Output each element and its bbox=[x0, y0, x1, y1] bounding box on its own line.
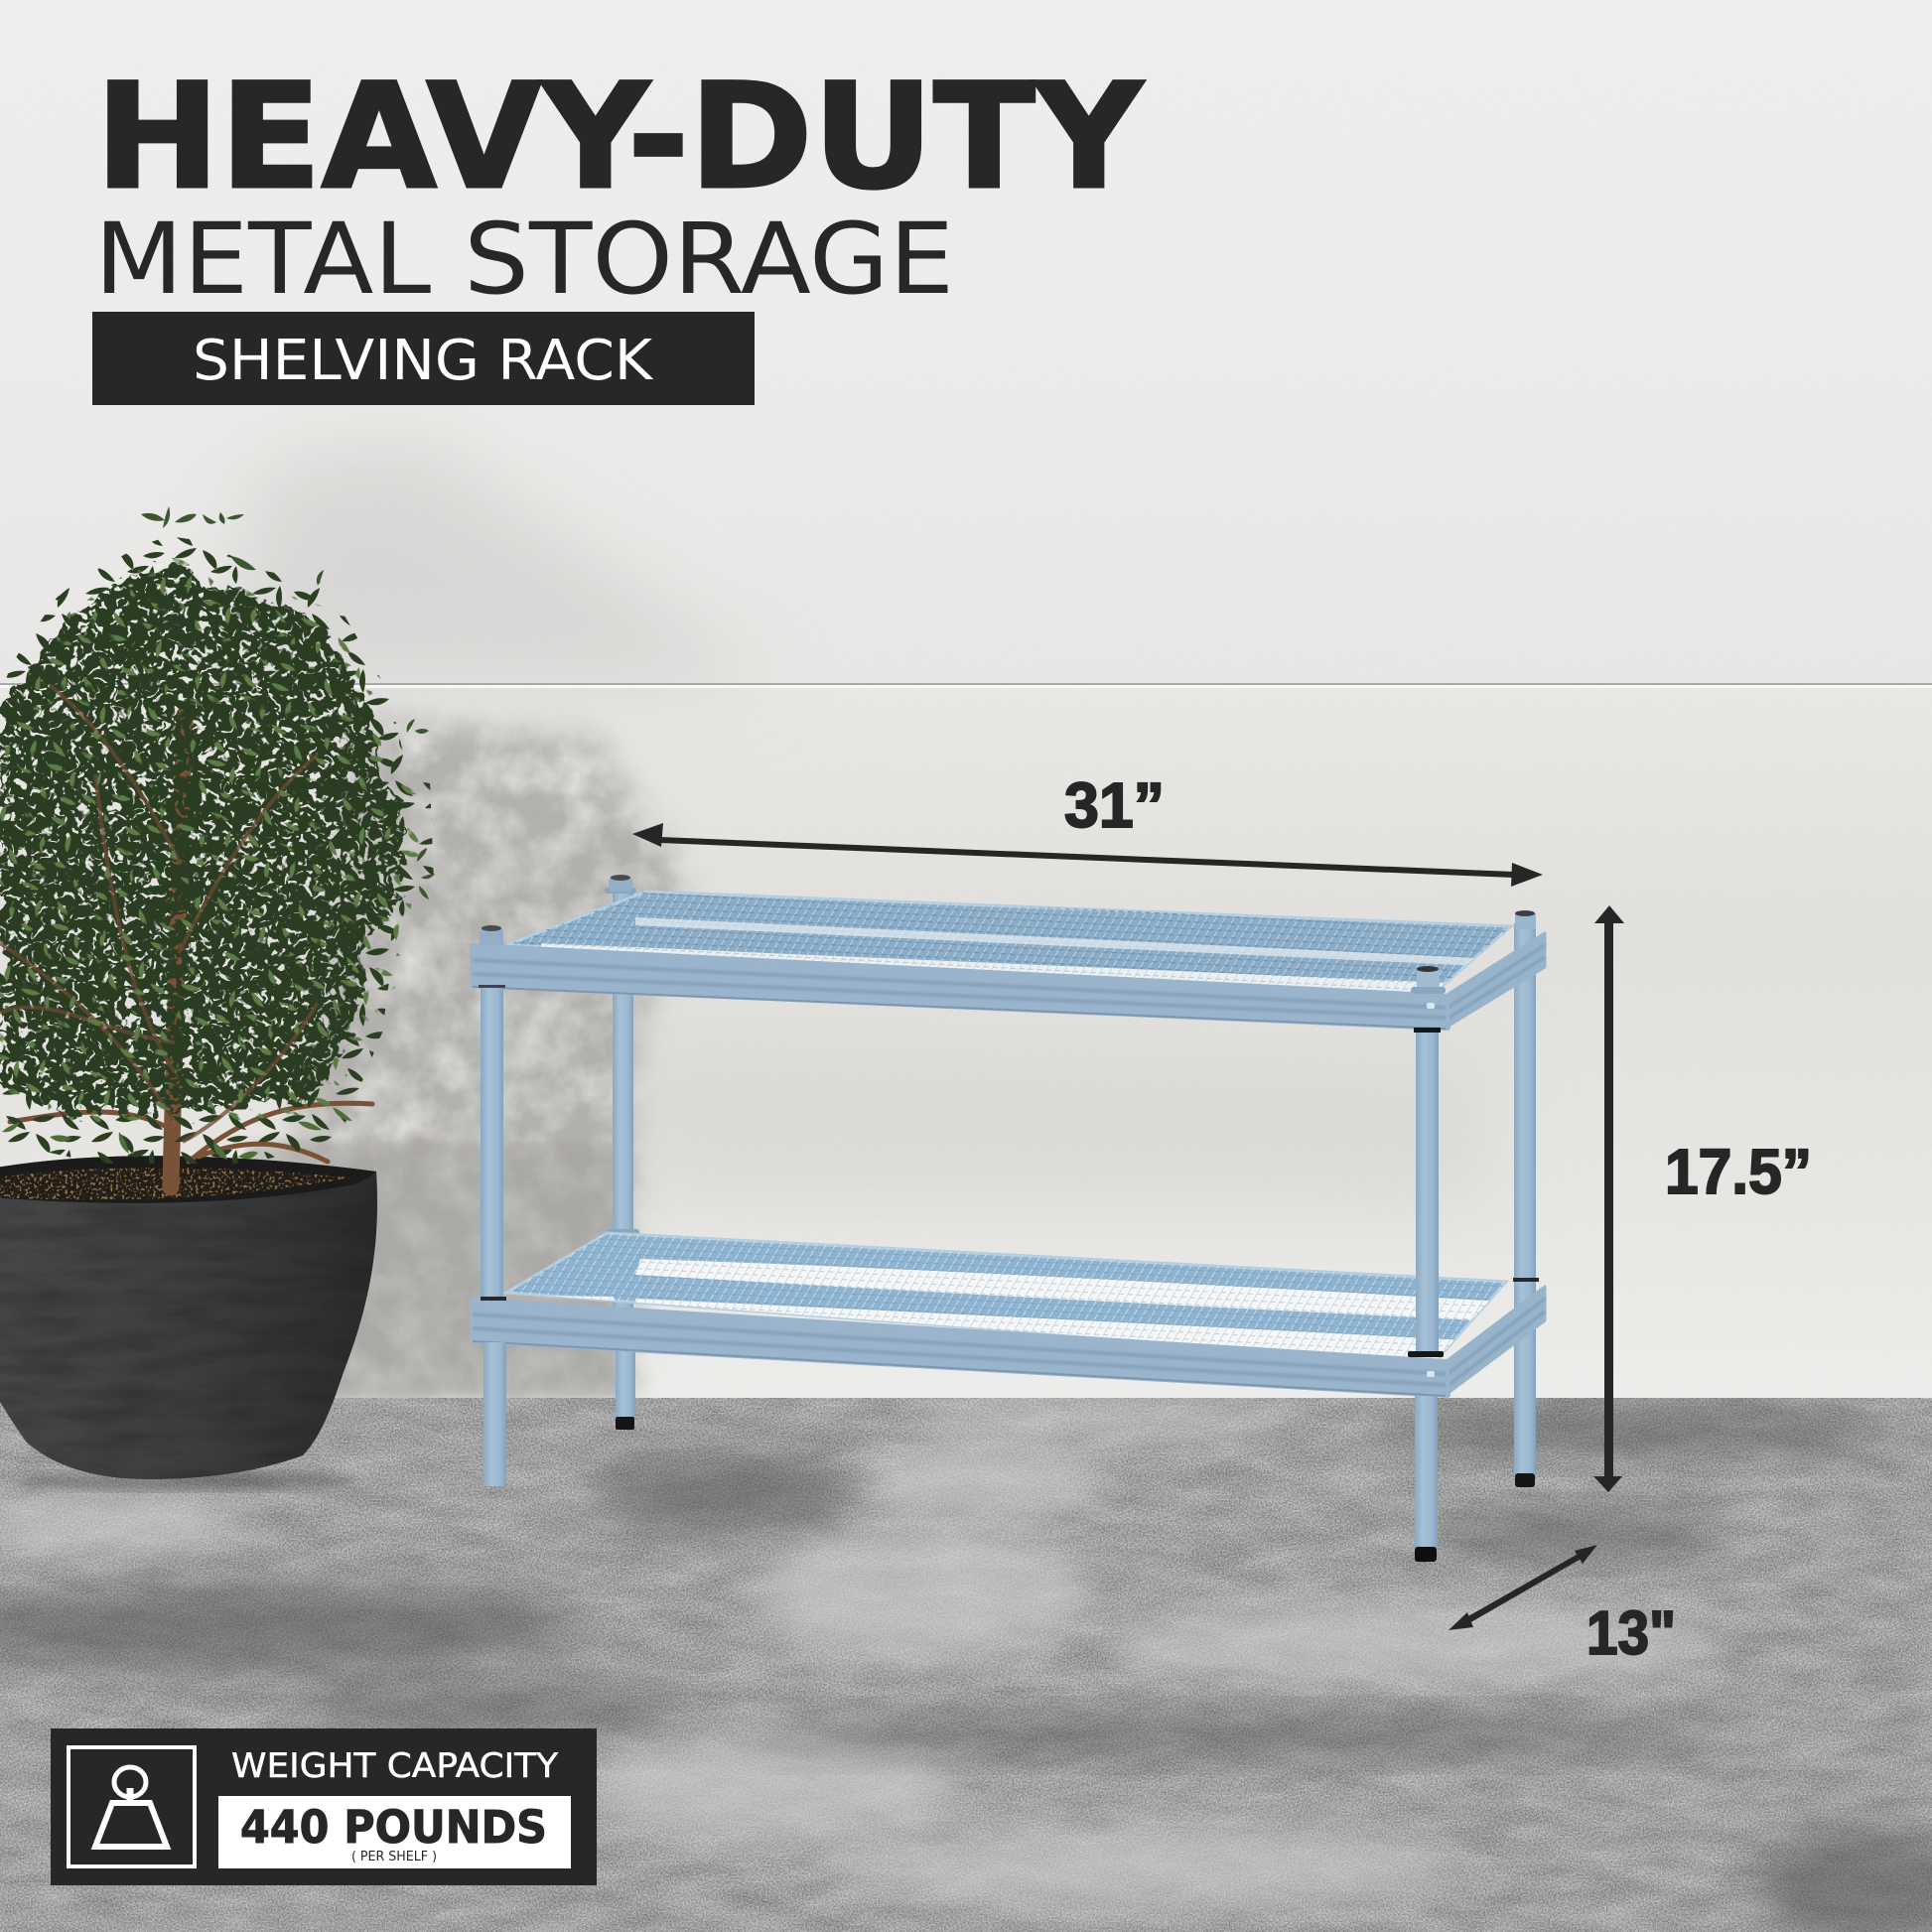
top shelf front rail bbox=[473, 946, 1448, 1029]
back right post bbox=[1513, 910, 1539, 1487]
bottom shelf mesh bbox=[503, 1231, 1509, 1358]
icon: weight bbox=[69, 1747, 195, 1866]
label: height 17.5: 17.5” bbox=[1665, 1136, 1812, 1207]
title: heavy-duty: HEAVY-DUTY bbox=[95, 53, 1145, 221]
tree foliage bbox=[0, 506, 435, 1164]
value box: 440 POUNDS bbox=[240, 1801, 547, 1854]
label: width 31: 31” bbox=[1064, 769, 1165, 841]
bottom shelf side rail bbox=[1446, 1287, 1545, 1395]
icon: plant pot bbox=[0, 1156, 377, 1479]
banner: shelving rack: SHELVING RACK bbox=[193, 329, 653, 393]
top shelf side rail bbox=[1446, 933, 1545, 1028]
label: weight capacity: WEIGHT CAPACITY bbox=[231, 1746, 558, 1786]
front right post bbox=[1408, 966, 1446, 1562]
panel: weight capacity badge bbox=[51, 1728, 597, 1885]
front left post bbox=[479, 925, 506, 1486]
subtitle: metal storage: METAL STORAGE bbox=[94, 203, 954, 317]
arrow: depth dimension bbox=[1449, 1545, 1597, 1630]
banner: shelving rack bbox=[92, 312, 755, 405]
value box bbox=[218, 1796, 571, 1868]
tree trunk bbox=[10, 715, 372, 1187]
label: depth 13: 13" bbox=[1587, 1599, 1676, 1668]
concrete floor bbox=[0, 1398, 1932, 1932]
wall background bbox=[0, 405, 1932, 1398]
back left post bbox=[605, 875, 639, 1430]
value box: ( PER SHELF ) bbox=[351, 1850, 437, 1864]
bottom shelf front rail bbox=[473, 1301, 1448, 1396]
shelving rack product bbox=[473, 875, 1545, 1562]
top shelf mesh bbox=[506, 890, 1515, 993]
arrow: width dimension bbox=[632, 823, 1543, 887]
arrow: height dimension bbox=[1593, 905, 1624, 1492]
plant in pot bbox=[0, 506, 435, 1479]
